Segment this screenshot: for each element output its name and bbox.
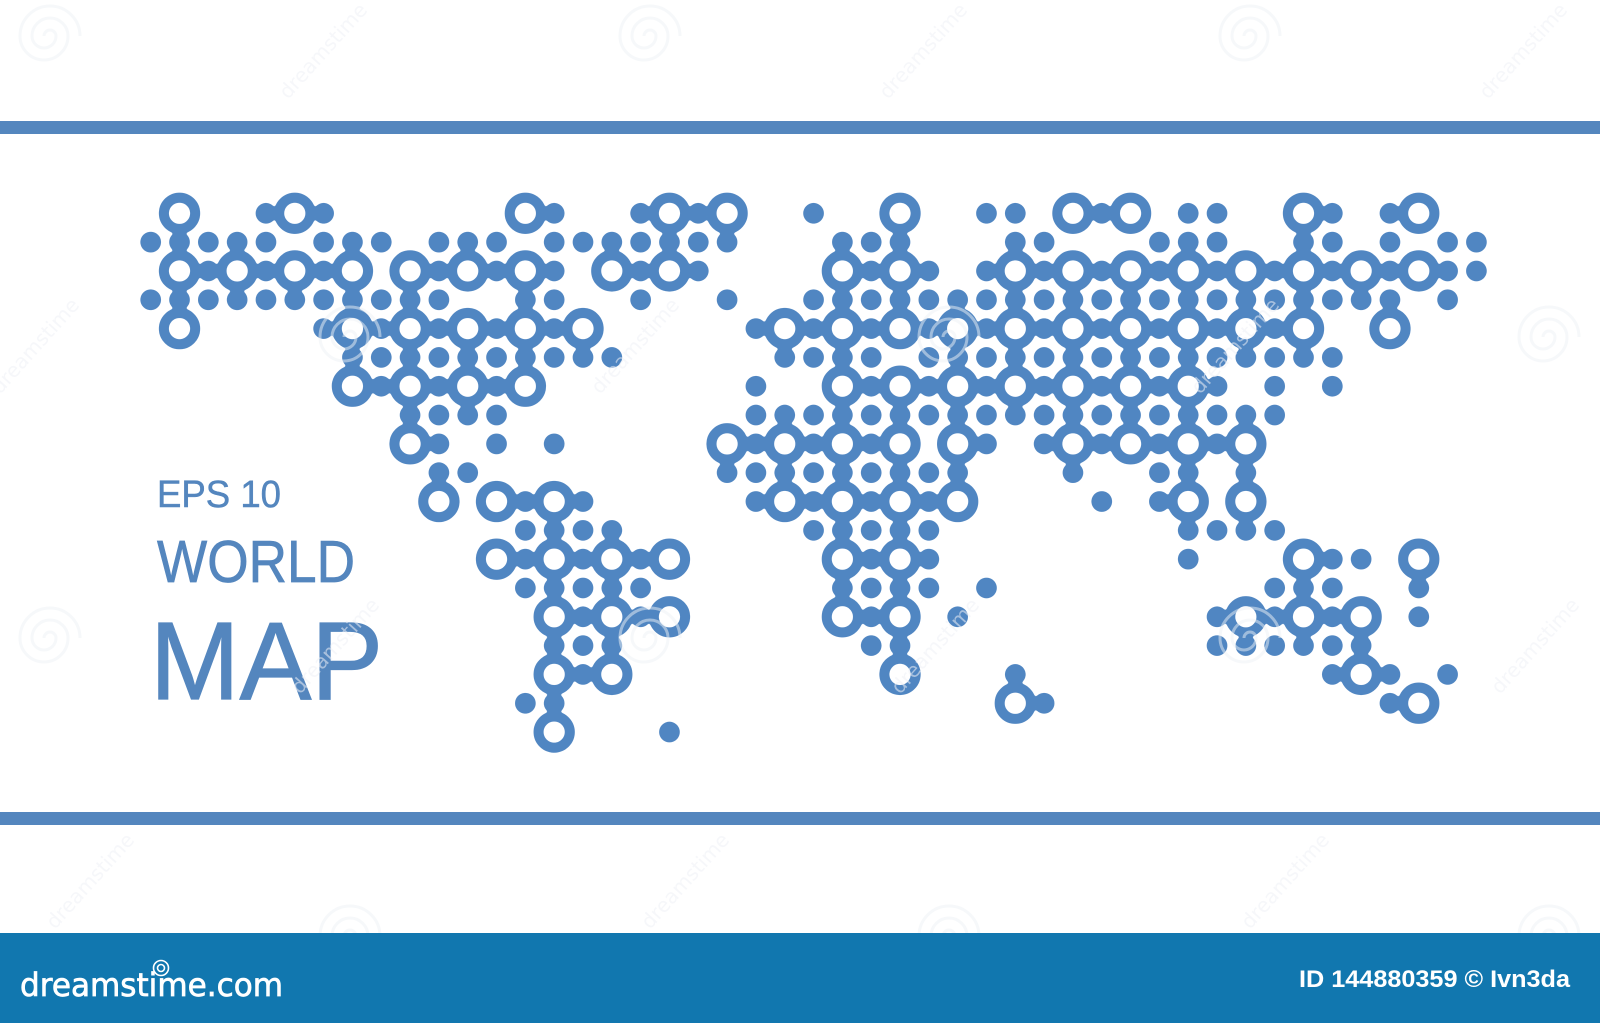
watermark text: dreamstime [1486, 593, 1584, 698]
watermark text: dreamstime [1474, 0, 1572, 103]
title: MAP: MAP [150, 600, 383, 723]
bottom rule [0, 812, 1600, 825]
watermark text: dreamstime [1236, 828, 1334, 933]
map: Eurasia and Africa [711, 198, 1476, 719]
watermark text: dreamstime [886, 593, 984, 698]
watermark text: dreamstime [586, 293, 684, 398]
watermark text: dreamstime [41, 828, 139, 933]
title: EPS 10: EPS 10 [157, 474, 281, 516]
watermark text: dreamstime [286, 593, 384, 698]
watermark text: dreamstime [274, 0, 372, 103]
footer band [0, 933, 1600, 1023]
watermark text: dreamstime [636, 828, 734, 933]
map: Oceania [1217, 543, 1448, 719]
dotted world map [151, 198, 1476, 748]
top rule [0, 121, 1600, 134]
footer logo text: dreamstime.com [20, 966, 283, 1004]
watermark text: dreamstime [1186, 293, 1284, 398]
watermark text: dreamstime [874, 0, 972, 103]
title: WORLD: WORLD [157, 529, 355, 595]
map: North and South America [151, 198, 743, 748]
footer logo spiral icon [154, 960, 168, 976]
footer id credit: ID 144880359 © Ivn3da [1299, 966, 1571, 993]
